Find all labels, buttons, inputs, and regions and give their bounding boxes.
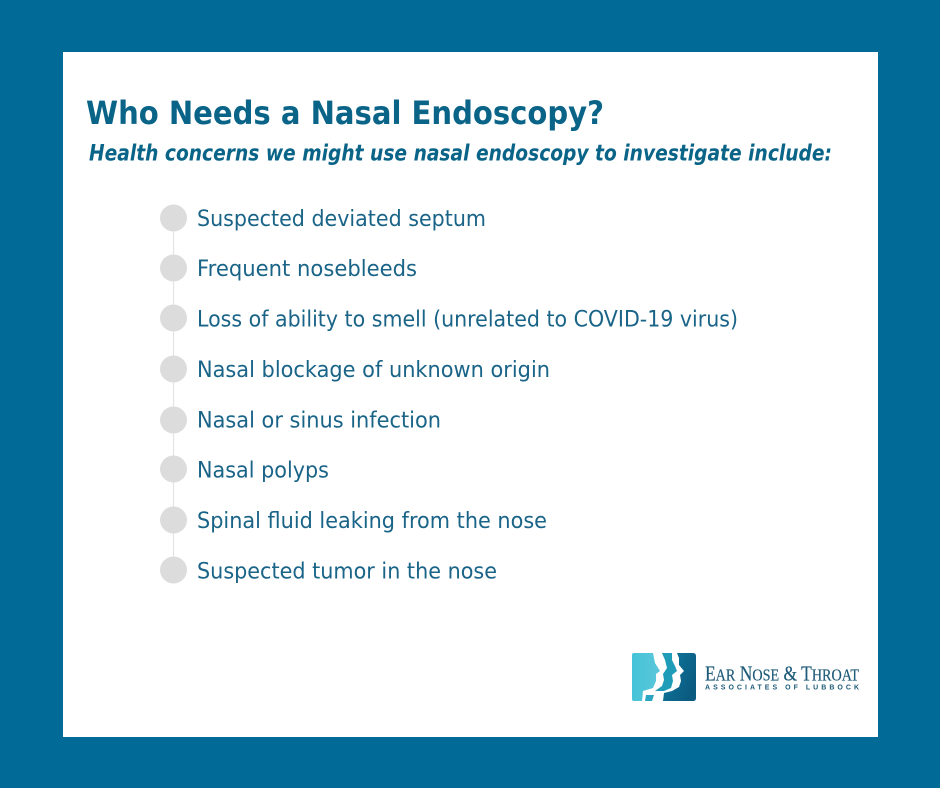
list of health concerns <box>160 204 738 584</box>
item: suspected deviated septum: Suspected deviated septum <box>197 206 486 232</box>
icon: facial profiles <box>632 653 696 701</box>
title: Who Needs a Nasal Endoscopy? <box>86 94 604 132</box>
logo wordmark: EAR NOSE & THROAT <box>705 662 860 686</box>
logo: Ear Nose & Throat Associates of Lubbock <box>632 653 860 701</box>
subtitle: Health concerns we might use nasal endoscopy to investigate include: <box>89 142 832 166</box>
item: suspected tumor: Suspected tumor in the nose <box>197 558 497 584</box>
timeline connector <box>172 218 174 570</box>
item: loss of ability to smell: Loss of ability to smell (unrelated to COVID-19 virus) <box>197 306 738 332</box>
item: frequent nosebleeds: Frequent nosebleeds <box>197 256 417 282</box>
item: nasal blockage: Nasal blockage of unknown origin <box>197 357 550 383</box>
item: nasal or sinus infection: Nasal or sinus infection <box>197 408 441 434</box>
logo tagline: ASSOCIATES OF LUBBOCK <box>705 684 859 692</box>
item: spinal fluid: Spinal fluid leaking from the nose <box>197 508 547 534</box>
panel: white card <box>63 52 878 737</box>
item: nasal polyps <box>160 456 329 484</box>
item: nasal polyps: Nasal polyps <box>197 458 329 484</box>
